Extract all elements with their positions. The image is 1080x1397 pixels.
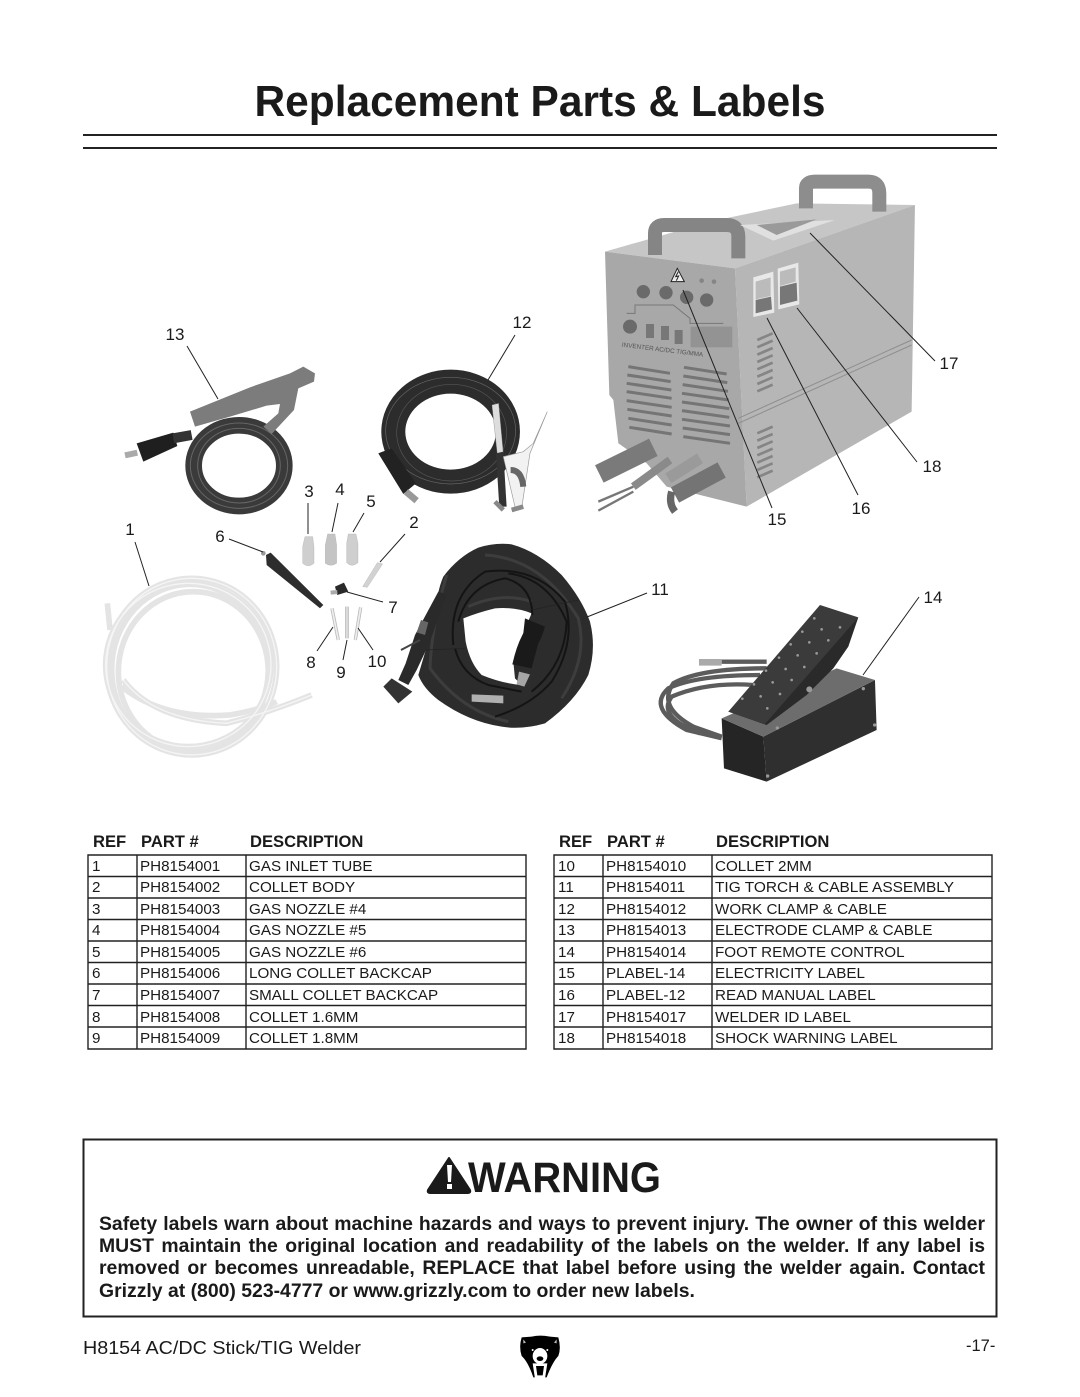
torch handle [398,592,447,685]
table rows: COLLET 1.6MM [249,1009,358,1026]
table rows: ELECTRODE CLAMP & CABLE [715,922,932,939]
table rows: 1 [92,858,100,875]
callout numbers: 5 [366,492,376,511]
table rows [92,858,438,1047]
table rows: 16 [558,987,575,1004]
table rows: PH8154004 [140,922,220,939]
table rows: PH8154003 [140,901,220,918]
callout numbers: 7 [388,598,398,617]
callout numbers: 6 [215,527,225,546]
title: Replacement Parts & Labels [254,77,826,126]
cable coil [386,377,516,484]
callout numbers [125,313,958,682]
table rows: PH8154010 [606,858,686,875]
table rows: PH8154012 [606,901,686,918]
part 2: collet body [363,563,383,587]
table rows: PH8154013 [606,922,686,939]
diagram: welder with labels [598,182,915,512]
table rows: SHOCK WARNING LABEL [715,1030,898,1047]
table header [93,832,363,851]
callout numbers: 9 [336,663,346,682]
part 13: electrode clamp and cable [125,367,315,508]
table header [559,832,829,851]
table rows: 10 [558,858,575,875]
control connector [472,694,503,703]
pedal plate [728,605,858,724]
electricity warning triangle [671,268,684,282]
table rows: PH8154014 [606,944,686,961]
warning text: Safety labels warn about machine hazards and ways to prevent injury. The owner of this welder [99,1212,985,1234]
small parts: nozzles, collets and backcaps [261,534,383,640]
table rows: 11 [558,879,574,896]
table rows: WELDER ID LABEL [715,1009,851,1026]
leader lines [135,233,935,675]
sheathed cable bundle [418,544,593,728]
table rows: 8 [92,1009,100,1026]
page number: -17- [966,1337,995,1355]
callout numbers: 11 [651,580,669,599]
rear handle [806,182,879,212]
table header: DESCRIPTION [250,832,363,851]
table rows: PH8154017 [606,1009,686,1026]
cable coil [190,423,288,508]
table rows: PH8154007 [140,987,220,1004]
table header: PART # [141,832,199,851]
table rows: GAS NOZZLE #6 [249,944,366,961]
read manual label [753,272,774,317]
table rows: TIG TORCH & CABLE ASSEMBLY [715,879,954,896]
callout numbers: 17 [940,354,958,373]
warning text: removed or becomes unreadable, REPLACE that label before using the welder again. Contact [99,1257,985,1279]
table rows: GAS NOZZLE #5 [249,922,366,939]
side face [735,205,915,507]
callout numbers: 10 [368,652,386,671]
callout numbers: 4 [335,480,345,499]
warning heading: WARNING [468,1154,661,1202]
control knobs [623,278,732,347]
table rows: PH8154011 [606,879,685,896]
clamp [492,403,503,454]
part 11: TIG torch and cable assembly [383,544,593,728]
welder ID label [740,219,835,241]
part 14: foot remote control [661,605,877,782]
part 8: collet [332,608,338,640]
callout numbers: 18 [923,457,941,476]
pedal rivets [741,617,876,778]
table rows: 4 [92,922,100,939]
table rows: READ MANUAL LABEL [715,987,876,1004]
part 9: collet [342,607,352,638]
warning text [99,1212,985,1304]
warning text: Grizzly at (800) 523-4777 or www.grizzly.com to order new labels. [99,1280,695,1302]
side vents [757,333,773,477]
table rows: WORK CLAMP & CABLE [715,901,887,918]
front handle [655,225,738,258]
table rows: ELECTRICITY LABEL [715,965,865,982]
model text: INVENTER AC/DC TIG/MMA [621,342,704,359]
icon: warning triangle [428,1158,470,1193]
callout numbers: 3 [304,482,314,501]
table rows: 12 [558,901,575,918]
icon: bear logo [520,1336,560,1379]
table rows: PLABEL-12 [606,987,685,1004]
table rows: GAS NOZZLE #4 [249,901,366,918]
part 12: work clamp and cable [378,377,547,510]
parts table: left [88,832,526,1049]
part 3: gas nozzle [303,537,314,566]
parts table: right [554,832,992,1049]
shock warning label [778,263,799,309]
table rows: PH8154008 [140,1009,220,1026]
part 4: gas nozzle [325,534,337,565]
plug [512,618,545,668]
table rows: COLLET 2MM [715,858,812,875]
callout numbers: 15 [768,510,786,529]
table rows: PH8154018 [606,1030,686,1047]
table rows: FOOT REMOTE CONTROL [715,944,905,961]
callout numbers: 14 [924,588,942,607]
table rows: 15 [558,965,575,982]
warning text: MUST maintain the original location and readability of the labels on the welder. If any label is [99,1235,985,1257]
pedal underside [728,617,858,725]
table rows: GAS INLET TUBE [249,858,373,875]
callout numbers: 16 [852,499,870,518]
part 7: small collet backcap [335,583,348,595]
callout numbers: 13 [166,325,184,344]
table rows: 17 [558,1009,575,1026]
part 10: collet [355,607,361,640]
table rows: LONG COLLET BACKCAP [249,965,432,982]
thin cables [453,571,569,717]
front cables and connectors [598,447,722,512]
enclosure [722,718,767,782]
callout numbers: 8 [306,653,316,672]
table header: REF [93,832,126,851]
part 1: gas inlet tube [106,578,312,755]
plug [137,433,177,462]
table rows: PH8154005 [140,944,220,961]
table rows: PH8154001 [140,858,220,875]
table rows: 7 [92,987,100,1004]
table header: REF [559,832,592,851]
table rows: PH8154002 [140,879,220,896]
table rows: 6 [92,965,100,982]
table rows: COLLET BODY [249,879,355,896]
table rows: 3 [92,901,100,918]
callout numbers: 12 [513,313,531,332]
cable [661,662,767,738]
part 5: gas nozzle [347,534,358,565]
table rows: 5 [92,944,100,961]
panel: warning box [84,1140,996,1316]
table rows: PH8154009 [140,1030,220,1047]
clamp handle [190,367,315,434]
welder top face [605,203,915,268]
table rows: SMALL COLLET BACKCAP [249,987,438,1004]
table rows: COLLET 1.8MM [249,1030,358,1047]
footer model name: H8154 AC/DC Stick/TIG Welder [83,1337,361,1358]
callout numbers: 2 [409,513,419,532]
table rows [558,858,954,1047]
sheath texture [430,555,581,722]
part 6: long collet backcap [266,553,323,608]
table rows: 13 [558,922,575,939]
callout numbers: 1 [125,520,135,539]
front face [605,252,747,507]
front vents [627,367,730,443]
table rows: 2 [92,879,100,896]
table rows: PH8154006 [140,965,220,982]
table rows: 9 [92,1030,100,1047]
table rows: 14 [558,944,575,961]
table header: DESCRIPTION [716,832,829,851]
table rows: 18 [558,1030,575,1047]
table rows: PLABEL-14 [606,965,685,982]
plug [378,448,416,494]
table header: PART # [607,832,665,851]
